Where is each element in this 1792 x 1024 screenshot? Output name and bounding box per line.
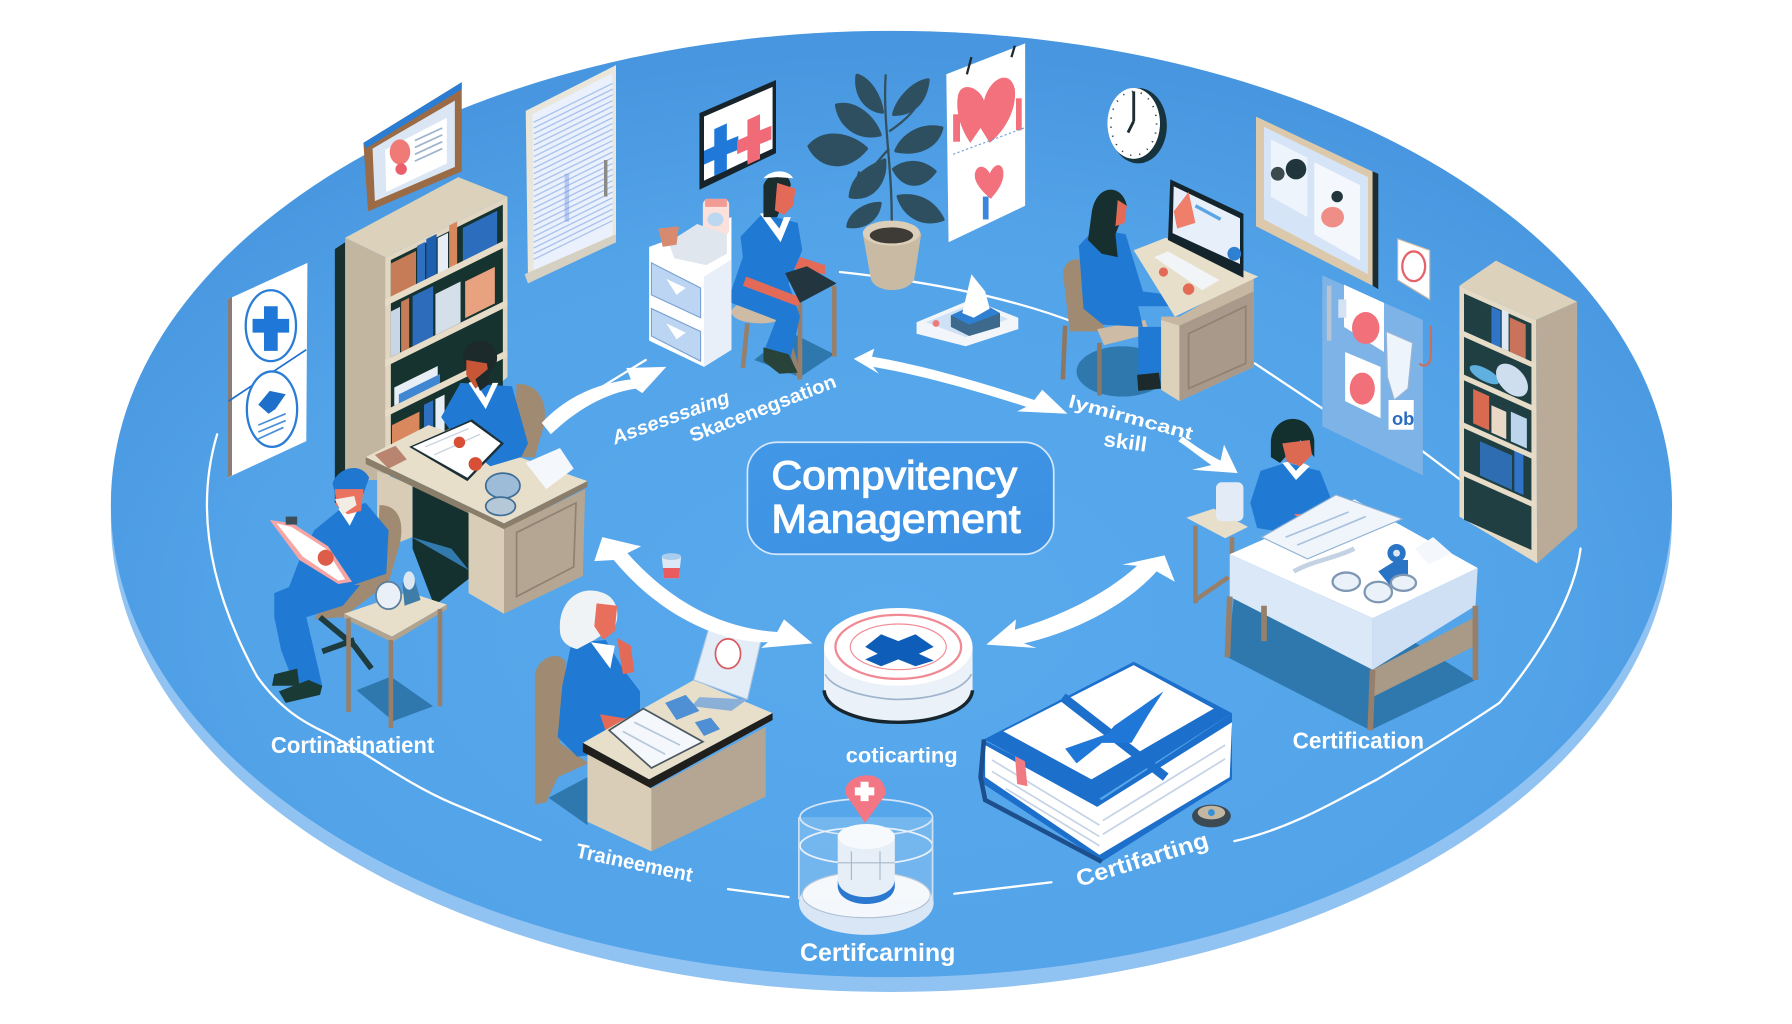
desk: man reading xyxy=(366,341,587,614)
small red circle chart xyxy=(1398,239,1430,299)
bookcase left xyxy=(335,177,507,503)
chair: clipboard man xyxy=(314,505,401,619)
arrow: assessing to skill, two-way xyxy=(854,349,1067,414)
side table with instrument xyxy=(344,571,447,728)
wall clock xyxy=(1107,88,1167,163)
bookcase right xyxy=(1459,261,1577,563)
label: coticarting: coticarting xyxy=(846,742,958,767)
label: skace: Skacenegsation xyxy=(686,371,839,447)
orbit path lines xyxy=(207,272,1581,897)
poster: medical cross signs xyxy=(227,263,307,478)
arrow: puck to bed, two-way xyxy=(986,555,1175,648)
bed with nurse reading xyxy=(1186,419,1478,730)
glass cylinder with pin xyxy=(799,775,934,935)
label: certifcarning: Certifcarning xyxy=(800,939,955,967)
cabinet with supplies xyxy=(649,199,731,367)
window with blinds xyxy=(525,65,616,283)
title text: Compvitency xyxy=(771,454,1017,498)
potted plant xyxy=(809,74,943,290)
central puck with cross xyxy=(824,608,973,722)
tissue box tray xyxy=(917,274,1018,346)
blue panel with charts xyxy=(1322,275,1431,475)
framed photo board xyxy=(1256,117,1378,289)
heart poster xyxy=(946,43,1025,242)
arrow: training to assessing xyxy=(542,367,666,434)
label: assessing: Assesssaing xyxy=(608,386,733,450)
arrow: puck to desk, two-way xyxy=(594,537,813,648)
bedside table xyxy=(1186,482,1248,603)
man with clipboard xyxy=(270,468,401,703)
nurse on stool xyxy=(731,171,837,379)
figure: man in blue scrubs xyxy=(441,341,528,466)
label: cortinatinatient: Cortinatinatient xyxy=(271,732,435,758)
framed medical crosses sign xyxy=(699,80,776,190)
chair: man xyxy=(514,384,545,457)
small disc xyxy=(1192,805,1231,827)
label: lymirmcant: lymirmcant xyxy=(1066,390,1195,444)
label: skill: skill xyxy=(1102,428,1148,457)
arrow: skill to certification xyxy=(1178,437,1238,473)
computer desk with nurse xyxy=(1063,179,1258,401)
chair: white-haired nurse xyxy=(535,656,589,805)
chair: computer nurse xyxy=(1063,259,1150,395)
large book with ribbon xyxy=(981,662,1232,862)
small cup xyxy=(662,553,681,578)
label: certification: Certification xyxy=(1293,728,1424,754)
desk: white-haired nurse xyxy=(535,591,773,851)
figure: nurse reading xyxy=(1250,419,1346,537)
label: certifarting: Certifarting xyxy=(1073,827,1211,892)
title text line 2: Management xyxy=(771,498,1021,542)
label: traineement: Traineement xyxy=(574,840,695,887)
framed certificate xyxy=(363,82,462,211)
center title box xyxy=(747,442,1054,554)
blue panel with charts: ob xyxy=(1392,408,1414,429)
